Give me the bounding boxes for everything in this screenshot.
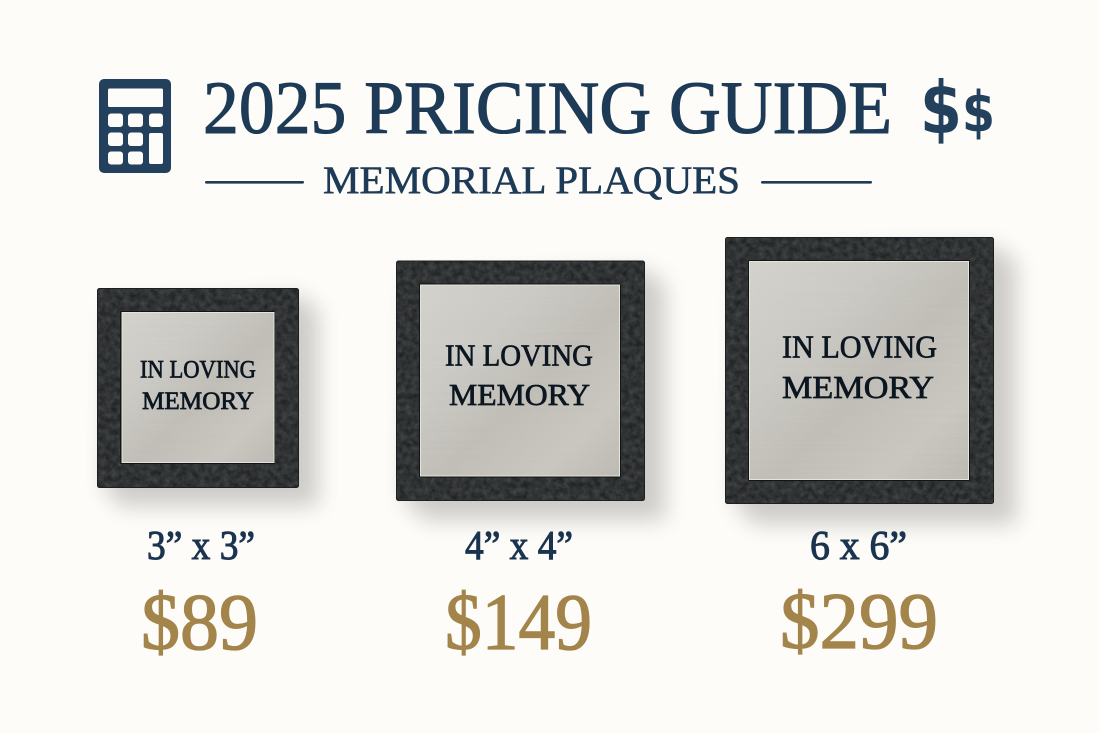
engraved text bbox=[782, 328, 937, 405]
engraved text: MEMORY bbox=[449, 377, 590, 412]
panel: 3 inch plaque bbox=[97, 288, 318, 667]
panel: 4 inch plaque bbox=[396, 260, 665, 667]
engraved text bbox=[445, 338, 593, 412]
size label: 4” x 4” bbox=[465, 522, 573, 568]
subtitle: MEMORIAL PLAQUES bbox=[323, 159, 740, 202]
engraved text: MEMORY bbox=[782, 369, 934, 405]
size label: 3” x 3” bbox=[147, 522, 255, 568]
panel: 6 inch plaque bbox=[725, 237, 1016, 666]
icon: small dollar sign: $ bbox=[962, 80, 995, 145]
size label: 6 x 6” bbox=[810, 522, 907, 568]
plaque shadow bbox=[105, 296, 318, 506]
plaque base: granite bbox=[396, 260, 645, 501]
icon: calculator bbox=[99, 79, 171, 173]
engraved text: IN LOVING bbox=[782, 328, 937, 364]
metal plate bbox=[748, 260, 970, 481]
engraved text: IN LOVING bbox=[140, 356, 256, 384]
price: $149 bbox=[445, 577, 592, 667]
plaque shadow bbox=[405, 270, 665, 520]
plaque shadow bbox=[735, 246, 1016, 524]
metal plate bbox=[419, 284, 621, 478]
price: $89 bbox=[141, 577, 258, 667]
plaque base: granite bbox=[97, 288, 299, 488]
metal plate bbox=[120, 311, 275, 464]
price: $299 bbox=[780, 576, 938, 666]
title: 2025 PRICING GUIDE bbox=[203, 67, 892, 150]
engraved text bbox=[140, 356, 256, 415]
plaque base: granite bbox=[725, 237, 994, 504]
icon: large dollar sign: $ bbox=[920, 66, 962, 150]
engraved text: IN LOVING bbox=[445, 338, 593, 372]
engraved text: MEMORY bbox=[142, 388, 254, 415]
subtitle right rule bbox=[761, 181, 872, 184]
subtitle left rule bbox=[205, 181, 304, 184]
header bbox=[99, 66, 995, 202]
